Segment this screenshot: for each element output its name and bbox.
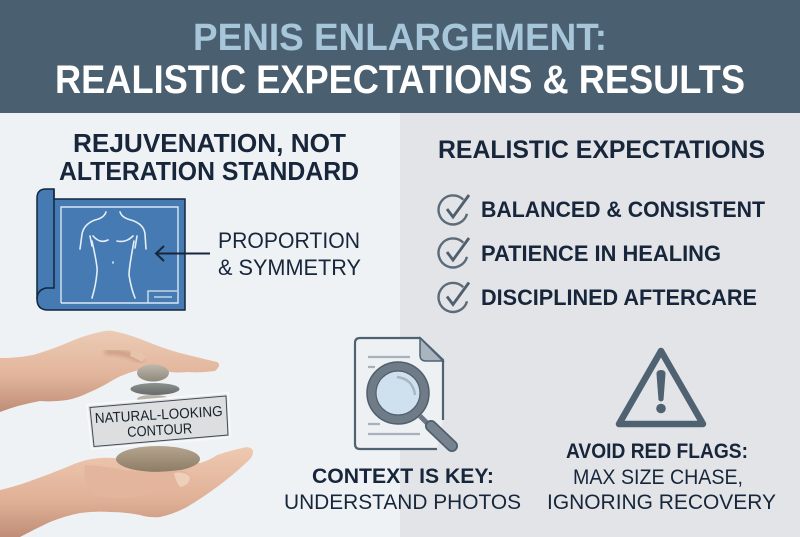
illustration: hands balancing stones — [0, 331, 253, 537]
icon: document with magnifying glass — [355, 338, 452, 449]
upper hand — [0, 331, 219, 412]
sign: natural-looking contour: NATURAL-LOOKING — [94, 404, 223, 427]
lower hand — [0, 447, 253, 537]
middle stone — [130, 383, 180, 395]
icon: blueprint with torso outline — [37, 189, 185, 310]
top stone — [137, 364, 169, 382]
thumb — [84, 465, 191, 498]
text: context is key: CONTEXT IS KEY: — [312, 465, 494, 488]
item: balanced and consistent: BALANCED & CONSISTENT — [481, 197, 765, 222]
title — [55, 17, 745, 102]
header band — [0, 0, 800, 113]
title: PENIS ENLARGEMENT: — [193, 17, 607, 59]
heading: realistic expectations: REALISTIC EXPECTATIONS — [438, 136, 765, 164]
small hidden stone — [137, 395, 169, 403]
label: proportion and symmetry: & SYMMETRY — [218, 255, 361, 280]
arrow: to blueprint — [156, 246, 210, 261]
thumbnail — [174, 472, 190, 487]
sign: natural-looking contour: CONTOUR — [127, 421, 193, 441]
text: avoid red flags: AVOID RED FLAGS: — [566, 440, 748, 463]
checklist — [439, 195, 765, 312]
panel: left background — [0, 113, 400, 537]
heading: rejuvenation standard: REJUVENATION, NOT — [73, 128, 346, 158]
heading: rejuvenation standard: ALTERATION STANDARD — [59, 156, 359, 186]
text: context is key — [284, 465, 521, 514]
text: avoid red flags — [547, 440, 776, 514]
item: patience in healing: PATIENCE IN HEALING — [481, 241, 721, 266]
text: context is key: UNDERSTAND PHOTOS — [284, 491, 521, 514]
label: proportion and symmetry — [218, 228, 361, 280]
sign: natural-looking contour — [87, 393, 230, 449]
heading: rejuvenation standard — [59, 128, 359, 186]
panel: right background — [400, 113, 800, 537]
icon: warning triangle — [619, 351, 703, 424]
text: avoid red flags: MAX SIZE CHASE, — [573, 466, 743, 489]
bottom stone — [116, 446, 200, 472]
title: REALISTIC EXPECTATIONS & RESULTS — [55, 58, 745, 102]
item: disciplined aftercare: DISCIPLINED AFTERCARE — [481, 285, 757, 310]
text: avoid red flags: IGNORING RECOVERY — [547, 491, 776, 514]
label: proportion and symmetry: PROPORTION — [218, 228, 360, 253]
